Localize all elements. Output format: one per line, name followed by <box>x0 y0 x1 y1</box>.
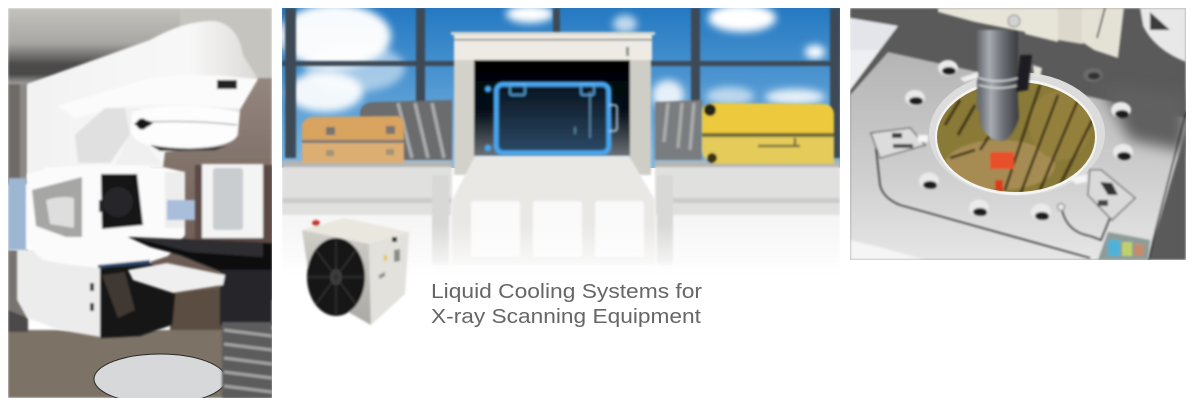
waiting seats <box>360 100 702 160</box>
white fade overlay <box>430 236 674 267</box>
icon: liquid chiller unit <box>302 218 409 325</box>
window frames <box>282 8 840 158</box>
stage plate <box>850 52 1186 260</box>
orange suitcase <box>302 116 404 163</box>
sky and clouds <box>279 4 840 168</box>
head housing and brackets <box>938 8 1186 62</box>
title: caption text: Liquid Cooling Systems for <box>431 281 702 303</box>
X-ray scanner frame and screen <box>451 32 655 175</box>
room background <box>8 8 272 398</box>
panel: airport X-ray scanner scene <box>279 4 840 277</box>
machine gantry arm and head <box>27 21 258 180</box>
holographic sticker <box>1098 232 1150 260</box>
floor disc <box>94 354 224 398</box>
X-ray image of suitcase <box>484 84 617 153</box>
panel: wafer inspection photo <box>850 8 1186 260</box>
circuit clips and wires <box>871 128 1135 258</box>
machine base and control panel <box>8 165 202 338</box>
treatment couch and side unit <box>128 164 272 325</box>
panel: radiotherapy linear accelerator photo <box>8 8 272 404</box>
wafer with ring <box>929 72 1105 196</box>
microscope objective column <box>960 30 1042 141</box>
scanner lower body and bins <box>432 156 673 265</box>
conveyor belts <box>282 160 840 230</box>
side console drawers <box>222 322 272 398</box>
yellow suitcase <box>702 103 834 164</box>
title: caption text <box>431 281 702 328</box>
mounting holes <box>905 60 1133 220</box>
title: caption text: X-ray Scanning Equipment <box>431 306 701 328</box>
granite table and paper <box>850 8 1186 260</box>
